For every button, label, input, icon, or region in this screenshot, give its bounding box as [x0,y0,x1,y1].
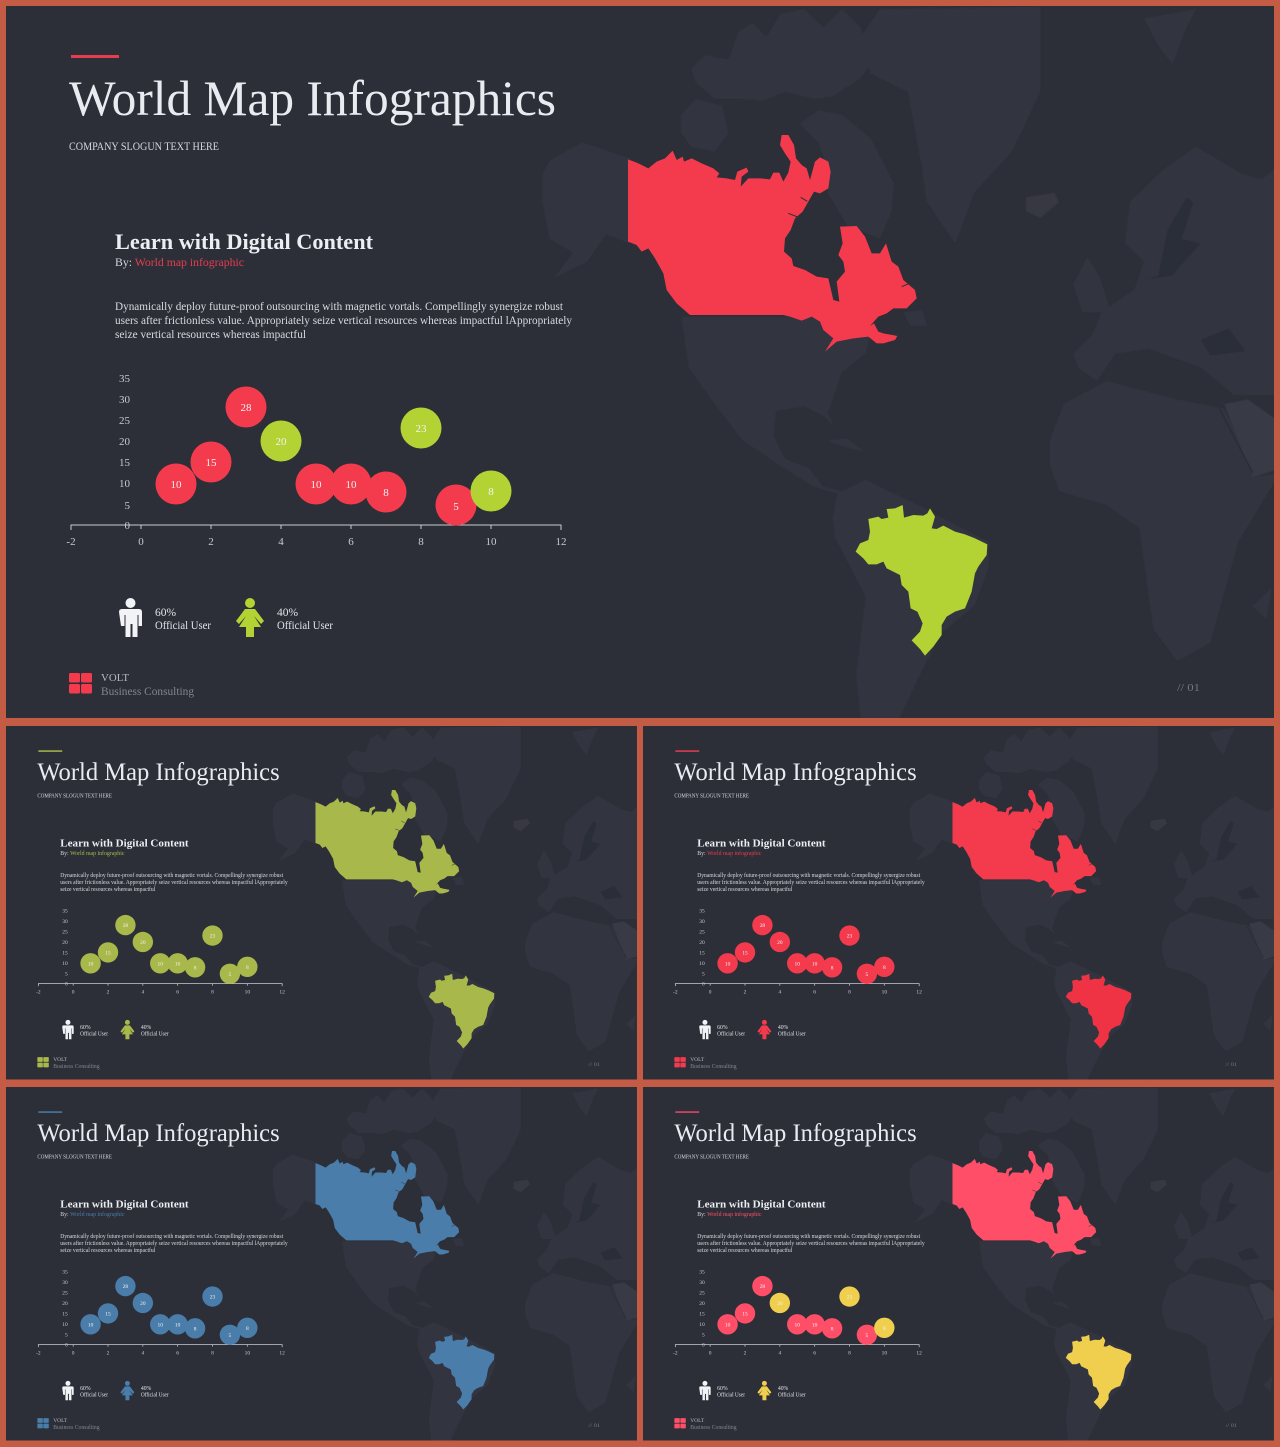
bubble chart: 8 [848,990,851,996]
bubble chart: 15 [699,1311,705,1317]
bubble chart: 0 [124,520,130,532]
body text: Dynamically deploy future-proof outsourcing with magnetic vortals. Compellingly synergize robust [697,872,921,879]
bubble chart: 35 [62,909,68,915]
legend: female share [141,1386,169,1398]
bubble chart: 6 [348,536,354,548]
slogan: COMPANY SLOGUN TEXT HERE [674,793,749,799]
bubble chart: 10 [699,961,705,967]
bubble chart: 30 [62,1280,68,1286]
logo mark [674,1057,686,1067]
bubble chart: 23 [416,423,427,435]
map: Canada highlighted [316,1151,459,1259]
heading: Learn with Digital Content [60,1199,189,1211]
bubble chart: 10 [175,1322,181,1328]
slogan: COMPANY SLOGUN TEXT HERE [674,1154,749,1160]
bubble chart: 35 [62,1270,68,1276]
bubble chart: 10 [699,1322,705,1328]
bubble chart: 20 [140,1301,146,1307]
bubble chart: 20 [777,1301,783,1307]
bubble chart: -2 [673,1351,678,1357]
bubble chart: 23 [210,1295,216,1301]
legend: male share: Official User [155,620,211,632]
bubble chart: 10 [882,990,887,996]
bubble chart: 28 [123,923,128,929]
bubble chart: 25 [62,930,68,936]
slogan: COMPANY SLOGUN TEXT HERE [69,141,219,153]
title: World Map Infographics [37,759,280,786]
body text: users after frictionless value. Appropriately seize vertical resources whereas impactful lAppropriately [60,879,288,886]
bubble chart: 2 [744,990,747,996]
bubble chart: 28 [240,402,252,414]
bubble chart: 10 [795,961,800,967]
bubble chart: 25 [62,1291,68,1297]
bubble chart: 10 [158,961,163,967]
brand name: VOLT [690,1057,705,1063]
body text [115,301,572,341]
icon: woman [120,1381,134,1400]
body text: seize vertical resources whereas impactful [697,886,793,893]
page number: // 01 [1226,1424,1238,1429]
map: Brazil highlighted [1066,1335,1131,1410]
bubble chart: 8 [194,965,197,971]
bubble chart: 28 [760,923,765,929]
world map background [514,819,637,960]
legend: female share: Official User [141,1030,169,1037]
bubble chart: 10 [88,1322,94,1328]
legend: male share [717,1386,745,1398]
bubble chart: 8 [383,487,389,499]
bubble chart: 12 [279,1351,285,1357]
map: Canada highlighted [316,790,459,898]
bubble chart: 0 [702,1343,705,1349]
bubble chart: -2 [36,990,41,996]
body text: users after frictionless value. Appropriately seize vertical resources whereas impactful lAppropriately [60,1240,288,1247]
legend: male share: 60% [717,1025,728,1031]
legend: female share [778,1025,806,1037]
legend: female share: 40% [141,1386,152,1392]
bubble chart: 10 [486,536,497,548]
byline: By: World map infographic [60,1211,125,1218]
legend: male share: Official User [717,1030,745,1037]
bubble chart: 0 [72,1351,75,1357]
bubble chart: 5 [229,1333,232,1339]
legend: female share: 40% [778,1386,789,1392]
bubble chart: 30 [119,394,130,406]
bubble chart: 5 [702,1333,705,1339]
bubble chart: 12 [279,990,285,996]
bubble chart: 10 [62,961,68,967]
body text [60,872,288,893]
logo mark [674,1418,686,1428]
bubble chart: 25 [699,1291,705,1297]
bubble chart: 4 [278,536,284,548]
legend: female share [141,1025,169,1036]
logo mark [37,1057,49,1067]
bubble chart: 12 [556,536,566,548]
legend: male share [717,1025,745,1037]
page number: // 01 [589,1063,601,1068]
icon: man [62,1381,74,1400]
legend: female share: Official User [778,1030,806,1037]
byline: By: World map infographic [60,850,125,857]
icon: man [699,1020,711,1039]
logo mark [69,673,92,694]
bubble chart: 0 [138,536,144,548]
bubble chart: 10 [812,1322,818,1328]
bubble chart: 15 [62,950,68,956]
map: Brazil highlighted [856,505,987,656]
title accent bar [675,1111,699,1113]
map: Brazil highlighted [429,1335,494,1410]
map: Canada highlighted [953,1151,1096,1259]
bubble chart: 8 [418,536,424,548]
bubble chart: 6 [813,1351,816,1357]
body text: seize vertical resources whereas impactful [60,886,156,893]
bubble chart: 8 [883,965,886,971]
world map background [542,7,1280,720]
bubble chart: 4 [141,990,144,996]
bubble chart: 10 [170,479,182,491]
bubble chart: 5 [866,972,869,978]
title: World Map Infographics [69,70,556,126]
bubble chart: 20 [276,436,287,448]
icon: man [119,598,142,637]
brand tagline: Business Consulting [690,1425,737,1431]
world map background [910,1087,1277,1441]
title accent bar [71,55,119,58]
bubble chart: 6 [176,1351,179,1357]
legend: female share: Official User [141,1391,169,1398]
bubble chart: 10 [88,961,94,967]
bubble chart: 25 [699,930,705,936]
bubble chart: 15 [119,457,130,469]
icon: man [699,1381,711,1400]
title: World Map Infographics [37,1120,280,1147]
body text: seize vertical resources whereas impactful [697,1247,793,1254]
body text: Dynamically deploy future-proof outsourcing with magnetic vortals. Compellingly synergize robust [697,1233,921,1240]
bubble chart: 30 [62,919,68,925]
logo mark [37,1418,49,1428]
bubble chart: 5 [866,1333,869,1339]
world map background [273,1087,640,1441]
bubble chart: 2 [107,990,110,996]
body text: Dynamically deploy future-proof outsourcing with magnetic vortals. Compellingly synergize robust [60,1233,284,1240]
bubble chart [673,909,922,996]
bubble chart: 23 [847,934,853,940]
bubble chart: 0 [65,1343,68,1349]
body text [697,1233,925,1254]
map: Canada highlighted [628,135,917,352]
page number: // 01 [589,1424,601,1429]
legend: female share: 40% [277,607,298,619]
bubble chart [66,373,566,548]
legend: male share: 60% [717,1386,728,1392]
bubble chart: 12 [916,1351,922,1357]
bubble chart: 20 [140,940,146,946]
bubble chart: 20 [62,1301,68,1307]
bubble chart: 10 [795,1322,800,1328]
legend: female share: Official User [277,620,333,632]
body text: seize vertical resources whereas impactful [115,329,306,341]
bubble chart: 28 [123,1284,128,1290]
bubble chart: 35 [699,909,705,915]
legend: female share: 40% [778,1025,789,1031]
bubble chart: 5 [65,1333,68,1339]
bubble chart: -2 [36,1351,41,1357]
bubble chart [673,1270,922,1357]
body text [60,1233,288,1254]
bubble chart [36,909,285,996]
bubble chart: 23 [210,934,216,940]
slogan: COMPANY SLOGUN TEXT HERE [37,1154,112,1160]
legend: male share: Official User [717,1391,745,1398]
brand name: VOLT [53,1418,68,1424]
slogan: COMPANY SLOGUN TEXT HERE [37,793,112,799]
bubble chart: 10 [62,1322,68,1328]
slide 5: pink and yellow variant [643,1087,1277,1441]
bubble chart: 15 [699,950,705,956]
bubble chart: 12 [916,990,922,996]
bubble chart: 35 [699,1270,705,1276]
icon: woman [236,598,264,637]
bubble chart: 4 [141,1351,144,1357]
bubble chart: 2 [744,1351,747,1357]
page number: // 01 [1177,683,1200,694]
bubble chart: 15 [742,1311,748,1317]
bubble chart: 0 [65,982,68,988]
icon: woman [120,1020,134,1039]
icon: woman [757,1381,771,1400]
brand tagline: Business Consulting [53,1425,100,1431]
brand tagline: Business Consulting [690,1064,737,1070]
legend: male share: Official User [80,1030,108,1037]
bubble chart: 5 [124,500,130,512]
bubble chart: 8 [848,1351,851,1357]
brand name: VOLT [690,1418,705,1424]
bubble chart: 10 [346,479,357,491]
bubble chart: 28 [760,1284,765,1290]
bubble chart: -2 [66,536,76,548]
bubble chart: 25 [119,415,130,427]
bubble chart: 10 [245,1351,250,1357]
bubble chart: 10 [882,1351,887,1357]
bubble chart: 0 [72,990,75,996]
bubble chart: 20 [699,1301,705,1307]
bubble chart: 10 [245,990,250,996]
bubble chart: 0 [702,982,705,988]
byline: By: World map infographic [697,850,762,857]
heading: Learn with Digital Content [697,1199,826,1211]
bubble chart: 5 [65,972,68,978]
bubble chart: 35 [119,373,130,385]
legend: female share [277,608,333,629]
title accent bar [38,1111,62,1113]
bubble chart: 2 [107,1351,110,1357]
brand name: VOLT [101,673,130,684]
brand tagline: Business Consulting [101,686,194,698]
bubble chart: 20 [699,940,705,946]
bubble chart: 8 [246,1326,249,1332]
body text [697,872,925,893]
map: Brazil highlighted [1066,974,1131,1049]
legend: male share: 60% [80,1025,91,1031]
body text: seize vertical resources whereas impactful [60,1247,156,1254]
heading: Learn with Digital Content [60,838,189,850]
bubble chart: 8 [211,990,214,996]
bubble chart [36,1270,285,1357]
bubble chart: 8 [488,486,494,498]
icon: woman [757,1020,771,1039]
byline: By: World map infographic [697,1211,762,1218]
bubble chart: 30 [699,919,705,925]
bubble chart: 15 [742,950,748,956]
map: Brazil highlighted [429,974,494,1049]
byline: By: World map infographic [115,257,244,269]
bubble chart: 30 [699,1280,705,1286]
bubble chart: 6 [813,990,816,996]
slide 3: red variant [643,726,1277,1080]
heading: Learn with Digital Content [115,229,374,254]
bubble chart: 5 [229,972,232,978]
bubble chart: 2 [208,536,214,548]
bubble chart: 20 [62,940,68,946]
legend: male share: 60% [155,607,176,619]
bubble chart: 8 [194,1326,197,1332]
bubble chart: 8 [831,965,834,971]
body text: users after frictionless value. Appropriately seize vertical resources whereas impactful lAppropriately [697,1240,925,1247]
legend: female share [778,1386,806,1398]
legend: female share: 40% [141,1025,152,1031]
bubble chart: 4 [778,990,781,996]
body text: users after frictionless value. Appropriately seize vertical resources whereas impactful lAppropriately [697,879,925,886]
body text: Dynamically deploy future-proof outsourcing with magnetic vortals. Compellingly synergize robust [115,301,564,313]
bubble chart: 5 [702,972,705,978]
bubble chart: 10 [725,1322,731,1328]
bubble chart: 15 [206,457,217,469]
icon: man [62,1020,74,1039]
bubble chart: 0 [709,990,712,996]
bubble chart: 0 [709,1351,712,1357]
legend: male share [80,1025,108,1036]
body text: users after frictionless value. Appropriately seize vertical resources whereas impactful lAppropriately [115,315,572,327]
bubble chart: 10 [310,479,322,491]
legend: male share [155,608,211,629]
bubble chart: 6 [176,990,179,996]
title accent bar [38,750,62,752]
bubble chart: 8 [246,965,249,971]
bubble chart: 8 [831,1326,834,1332]
world map background [1150,819,1274,960]
brand tagline: Business Consulting [53,1064,100,1070]
title: World Map Infographics [674,1120,917,1147]
bubble chart: 20 [119,436,130,448]
bubble chart: 15 [62,1311,68,1317]
page number: // 01 [1226,1063,1238,1068]
bubble chart: 23 [847,1295,853,1301]
body text: Dynamically deploy future-proof outsourcing with magnetic vortals. Compellingly synergize robust [60,872,284,879]
brand name: VOLT [53,1057,68,1063]
bubble chart: 20 [777,940,783,946]
title: World Map Infographics [674,759,917,786]
slide 4: blue variant [6,1087,640,1441]
bubble chart: 10 [812,961,818,967]
bubble chart: 8 [211,1351,214,1357]
bubble chart: 10 [158,1322,163,1328]
bubble chart: 10 [725,961,731,967]
legend: female share: Official User [778,1391,806,1398]
slide 2: olive variant [6,726,640,1080]
bubble chart: 15 [105,1311,111,1317]
slide 1: large red and green variant [6,6,1280,720]
title accent bar [675,750,699,752]
heading: Learn with Digital Content [697,838,826,850]
legend: male share [80,1386,108,1398]
bubble chart: 10 [119,478,130,490]
bubble chart: 15 [105,950,111,956]
legend: male share: Official User [80,1391,108,1398]
bubble chart: -2 [673,990,678,996]
map: Canada highlighted [953,790,1096,898]
bubble chart: 8 [883,1326,886,1332]
bubble chart: 10 [175,961,181,967]
bubble chart: 4 [778,1351,781,1357]
bubble chart: 5 [453,501,459,513]
legend: male share: 60% [80,1386,91,1392]
